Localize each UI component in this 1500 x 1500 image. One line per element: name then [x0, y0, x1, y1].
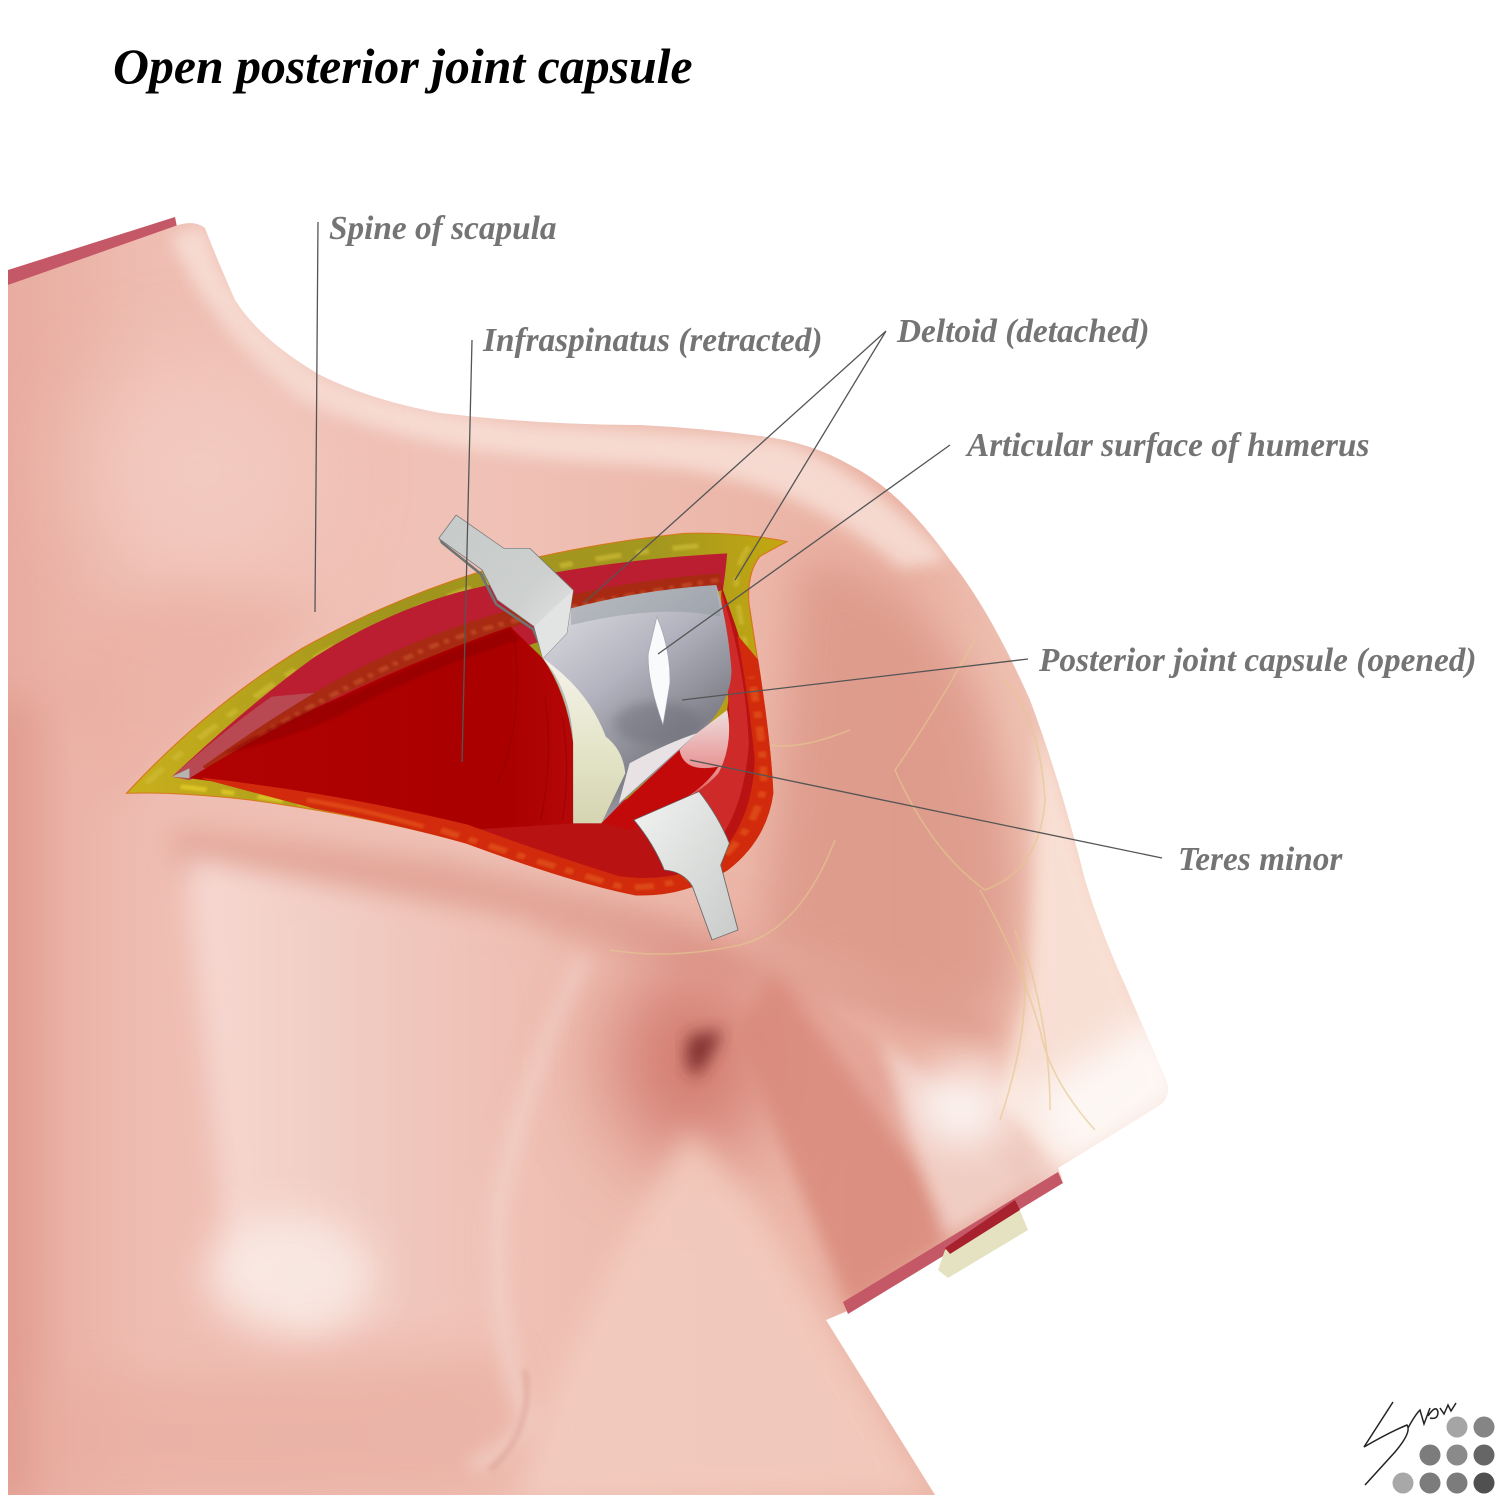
- articular surface slit: [648, 617, 670, 725]
- chest bright patch: [205, 1215, 375, 1335]
- label: Infraspinatus (retracted): [462, 322, 822, 762]
- humerus bone stub: [938, 1200, 1028, 1278]
- capsule top shadow: [571, 585, 721, 625]
- cut edge: arm band: [843, 1172, 1063, 1314]
- chest light patch: [177, 847, 518, 1321]
- yellow mottling: [146, 545, 749, 818]
- label: Spine of scapula: [315, 210, 557, 612]
- scapula shading: [118, 596, 285, 760]
- surgical wound: [127, 515, 787, 940]
- cut edge: neck band: [8, 217, 178, 285]
- band under incision: [170, 830, 1000, 1050]
- upper back light area: [78, 382, 286, 559]
- capsule shading: [614, 702, 701, 745]
- title: Open posterior joint capsule: [113, 39, 693, 94]
- label: Deltoid (detached): [585, 313, 1149, 602]
- pale tissue lower: [619, 733, 697, 803]
- posterior joint capsule: [543, 585, 732, 823]
- shoulder deltoid: [760, 560, 1016, 1020]
- right arm light: [1000, 736, 1142, 1166]
- arm muscle: [735, 975, 1050, 1310]
- deltoid upper layer: [172, 553, 727, 780]
- label: Posterior joint capsule (opened): [682, 642, 1476, 700]
- body silhouette: skin: [0, 200, 1200, 1500]
- pectoral fold: [470, 960, 585, 1465]
- right muscle and lower flap: [467, 583, 762, 880]
- teres minor: [601, 710, 729, 830]
- armpit dark spot: [686, 1030, 722, 1078]
- label: Articular surface of humerus: [658, 427, 1369, 654]
- label: Deltoid (detached): Deltoid (detached): [896, 313, 1149, 350]
- neck highlight: [170, 225, 950, 570]
- label: Infraspinatus (retracted): Infraspinatus (retracted): [482, 322, 822, 359]
- label: Teres minor: Teres minor: [1178, 841, 1343, 878]
- deltoid fat band: [202, 573, 721, 770]
- muscle fibres: [497, 637, 567, 820]
- lower retractor: [634, 792, 738, 940]
- signature: [1364, 1402, 1456, 1485]
- upper retractor: [439, 515, 573, 658]
- cream tissue: [543, 658, 625, 823]
- right and lower fat band: [202, 637, 773, 895]
- infraspinatus muscle: [189, 627, 640, 877]
- label: Spine of scapula: Spine of scapula: [329, 210, 557, 247]
- pale arm cylinder: [880, 1040, 1060, 1240]
- left edge shading: [8, 701, 43, 1495]
- grey wound corner: [172, 768, 189, 778]
- skin edge: yellow fat: [127, 533, 787, 895]
- muscle dark fold: [224, 628, 519, 753]
- armpit halo: [610, 960, 770, 1160]
- arm white haze: [915, 1065, 1015, 1145]
- label: Teres minor: [690, 760, 1343, 878]
- label: Articular surface of humerus: Articular surface of humerus: [965, 427, 1369, 464]
- lower chest dark: [108, 1358, 512, 1495]
- lower torso flank: [520, 1130, 935, 1500]
- logo: signature and dots: [1364, 1402, 1494, 1494]
- label: Posterior joint capsule (opened): Posterior joint capsule (opened): [1038, 642, 1476, 679]
- dots: [1392, 1416, 1494, 1494]
- nerves: [610, 640, 1095, 1130]
